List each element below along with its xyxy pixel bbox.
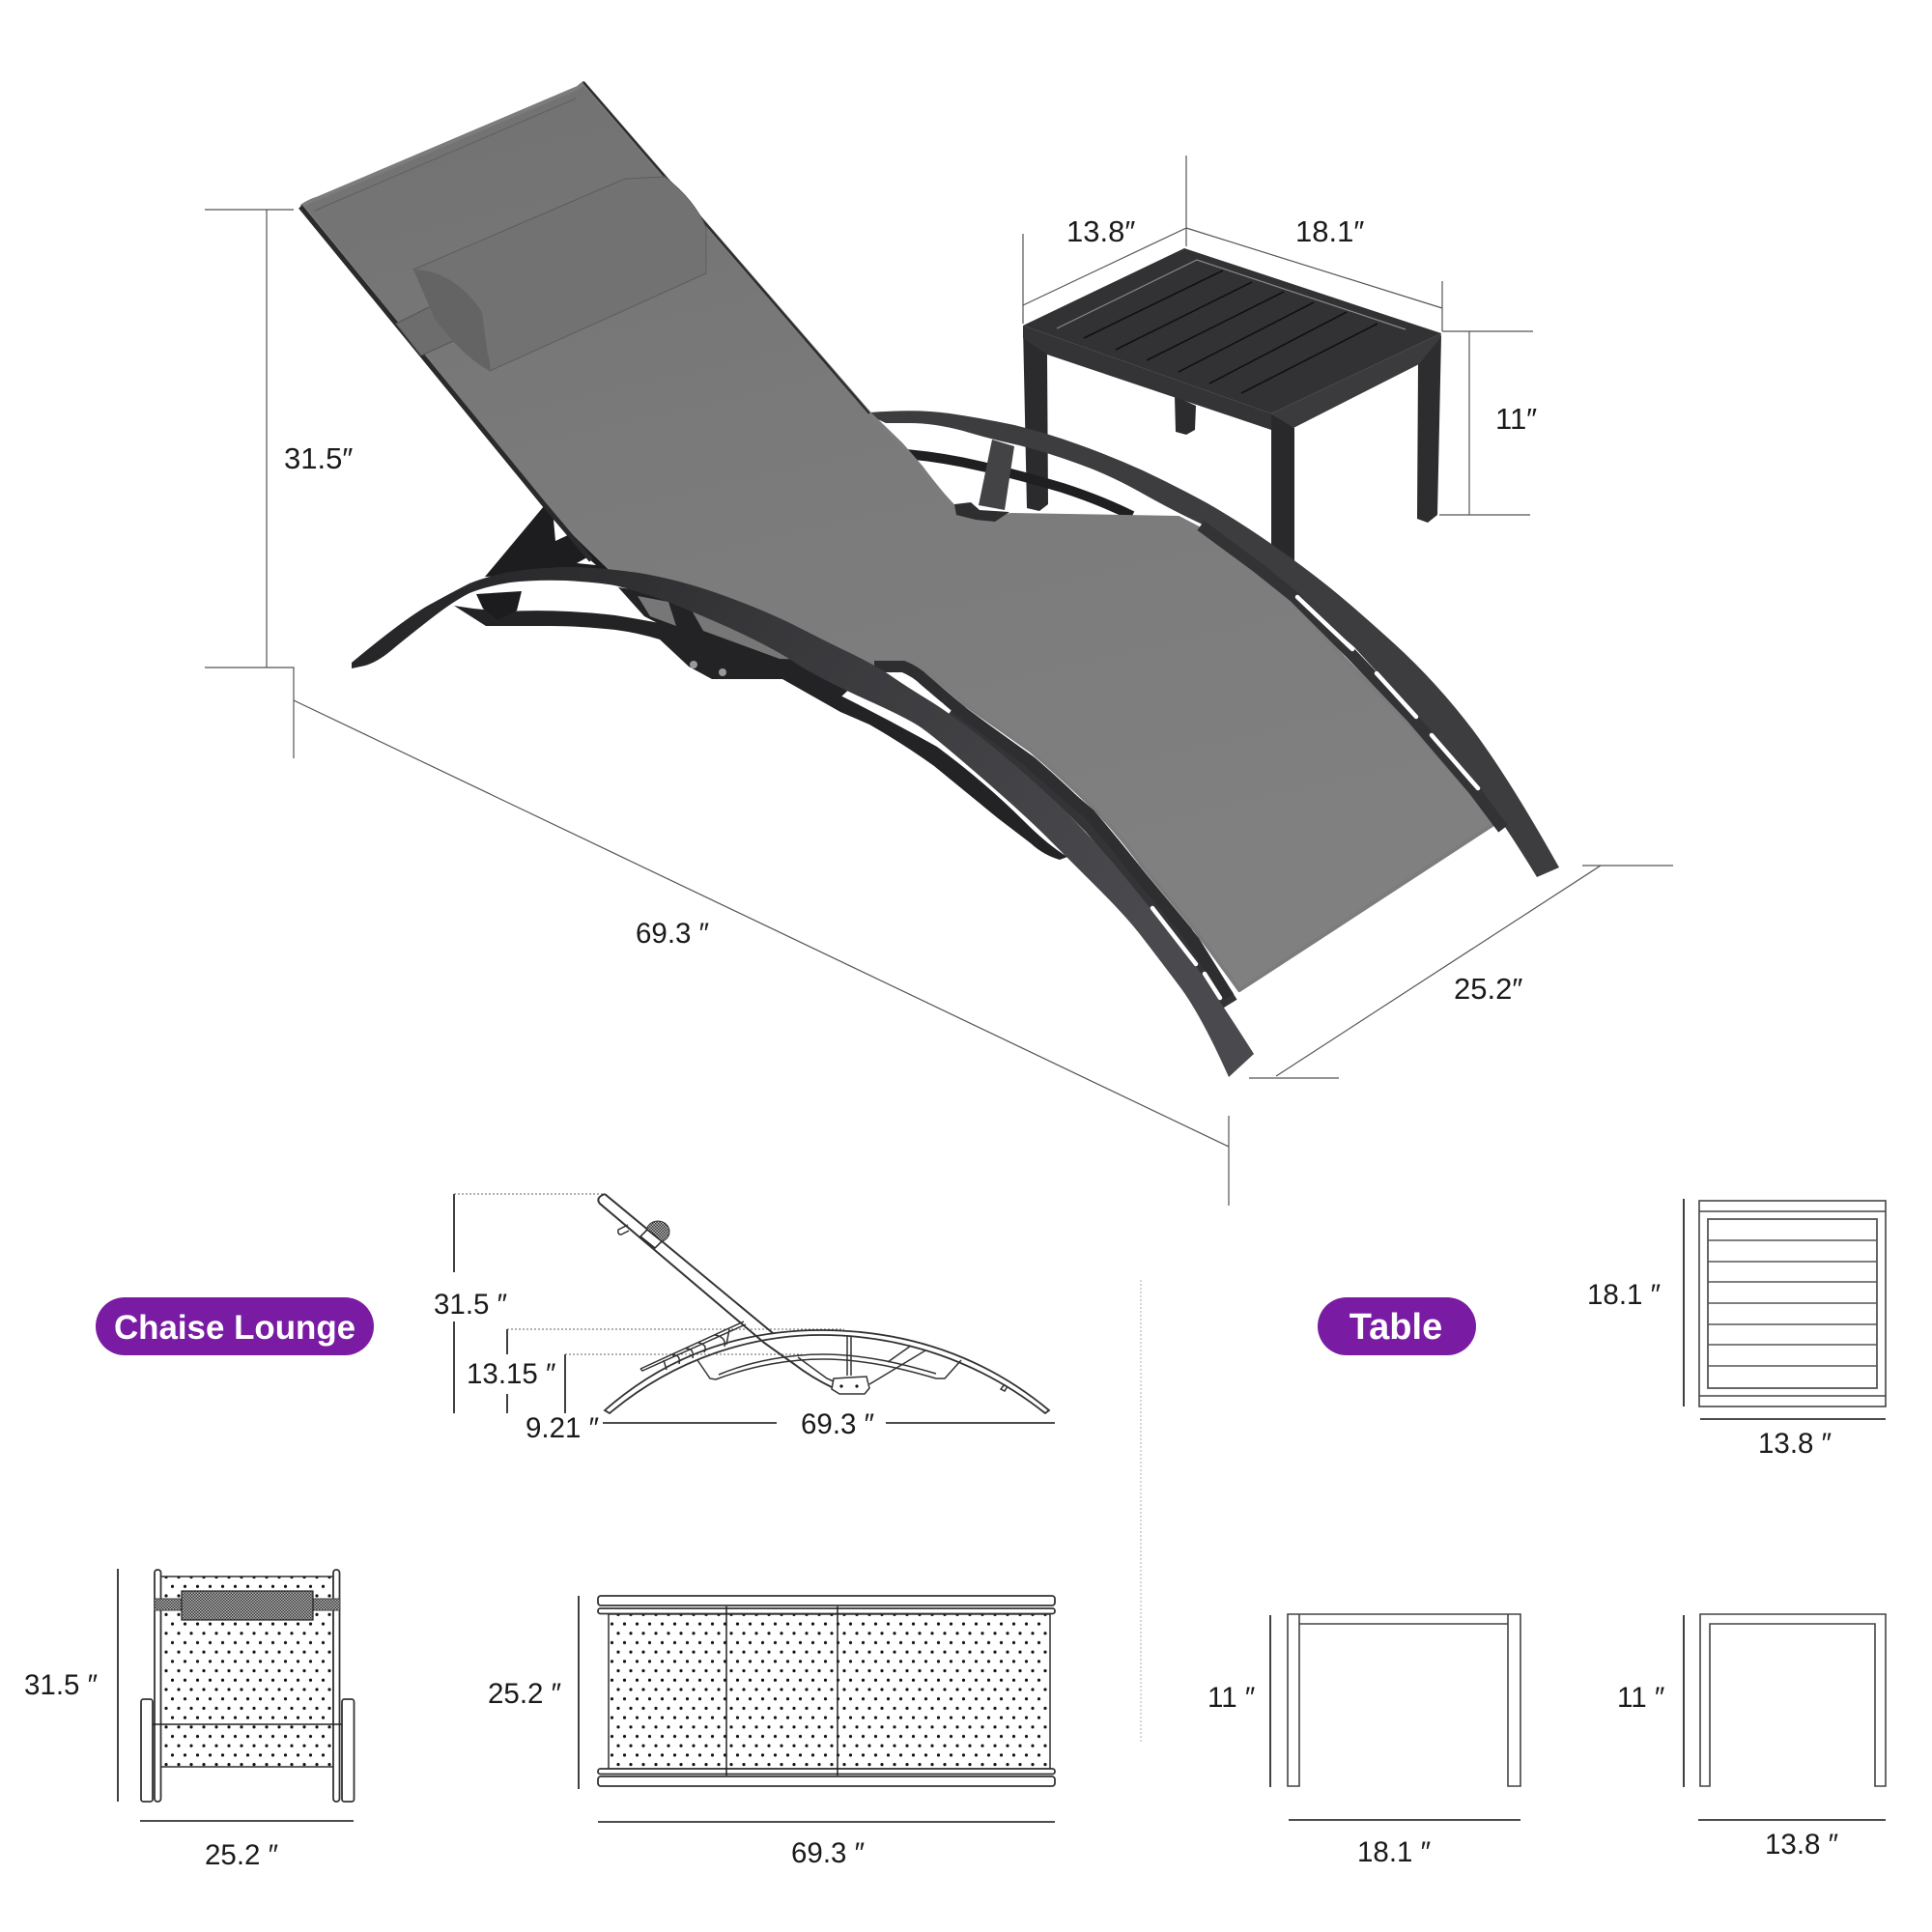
sling side rail [300, 207, 591, 560]
table front view drawing [1208, 1614, 1520, 1868]
labels: 31.5 ″ [434, 1289, 507, 1321]
labels: 18.1 ″ [1587, 1279, 1661, 1311]
rail slots near [916, 688, 1220, 998]
side view drawing [434, 1194, 1055, 1444]
cross members [726, 1606, 838, 1776]
pill: Chaise Lounge: Chaise Lounge [114, 1309, 355, 1347]
labels: 13.8 ″ [1765, 1829, 1838, 1861]
labels: 11 ″ [1617, 1682, 1664, 1714]
labels [1587, 1279, 1832, 1460]
labels [1208, 1682, 1431, 1868]
near arm rail [352, 567, 1254, 1077]
rails [598, 1596, 1055, 1786]
labels: 69.3 ″ [791, 1837, 865, 1869]
main dimension: length 69.3 [294, 700, 1229, 1206]
table back leg [1175, 396, 1196, 435]
table top [1023, 248, 1441, 413]
sling far edge rim [583, 82, 869, 413]
main dimension: height 31.5 [205, 210, 353, 758]
rails [155, 1570, 160, 1802]
main dimension: width 25.2 [1249, 866, 1673, 1078]
dimension lines [454, 1194, 1055, 1423]
dimension lines [579, 1596, 1055, 1822]
labels: 9.21 ″ [526, 1412, 599, 1444]
labels: 69.3 ″ [801, 1408, 874, 1440]
pill: Table [1318, 1297, 1476, 1355]
lower arc [716, 1354, 936, 1379]
head pillow [646, 1221, 669, 1242]
struts [798, 1336, 925, 1384]
labels: 13.8 ″ [1758, 1428, 1832, 1460]
labels [1617, 1682, 1838, 1861]
pill: Chaise Lounge [96, 1297, 374, 1355]
label 13.8: 13.8″ [1066, 214, 1135, 248]
table front leg [1271, 413, 1294, 570]
legs [697, 1360, 1008, 1391]
peg [618, 1225, 629, 1235]
strap [155, 1599, 340, 1610]
grey fabric below arm [638, 596, 676, 626]
wheels [141, 1699, 153, 1802]
table dimensions [1023, 156, 1537, 515]
dimension lines [1270, 1615, 1520, 1820]
rail slots far [1297, 597, 1478, 788]
dimension lines [1684, 1199, 1886, 1419]
wheel mechanism [476, 591, 522, 620]
dimension lines [1684, 1615, 1886, 1820]
sling fabric [302, 83, 1495, 990]
labels: 13.15 ″ [467, 1358, 555, 1390]
pivot bolts [690, 661, 726, 676]
pillow [182, 1591, 313, 1620]
pillow [413, 177, 706, 371]
labels [24, 1669, 278, 1871]
top view drawing [488, 1596, 1055, 1869]
far arm rail [869, 411, 1559, 877]
table photo [1023, 248, 1441, 570]
fabric [609, 1614, 1050, 1769]
label 18.1: 18.1″ [1295, 214, 1364, 248]
chaise lounge photo [300, 82, 1559, 1077]
strap [396, 306, 460, 355]
table right apron [1271, 333, 1441, 428]
labels: 18.1 ″ [1357, 1836, 1431, 1868]
outer arc [605, 1330, 1049, 1413]
table top view drawing [1587, 1199, 1886, 1460]
back view drawing [24, 1569, 354, 1871]
slat panel [1708, 1219, 1877, 1388]
labels: 31.5 ″ [24, 1669, 98, 1701]
labels: 25.2 ″ [488, 1678, 561, 1710]
struts and under-seat bar [618, 587, 855, 697]
table left apron [1023, 326, 1271, 430]
labels [488, 1678, 865, 1869]
far arm strap [979, 440, 1014, 510]
label 11: 11″ [1495, 402, 1537, 436]
label: 25.2″ [1454, 972, 1522, 1006]
dimension lines [118, 1569, 354, 1821]
table side view drawing [1617, 1614, 1886, 1861]
under-seat lower rail and bracket [454, 606, 1067, 860]
far side lower rail [906, 454, 1132, 516]
centre bracket [832, 1377, 869, 1394]
back support frame [485, 506, 618, 577]
label: 31.5″ [284, 441, 353, 475]
label: 69.3 ″ [636, 918, 709, 950]
labels: 25.2 ″ [205, 1839, 278, 1871]
cross line [153, 1723, 342, 1725]
table right leg [1417, 335, 1441, 523]
stitching [315, 99, 576, 211]
pill: Table: Table [1350, 1307, 1442, 1348]
table back left leg [1023, 327, 1048, 511]
table slats [1057, 260, 1406, 393]
ratchet support [640, 1321, 746, 1371]
hinge [954, 502, 1009, 522]
labels [434, 1289, 874, 1444]
fabric [160, 1577, 333, 1767]
backrest [598, 1194, 834, 1388]
divider [1140, 1280, 1142, 1743]
seat near inner rail [874, 667, 1229, 997]
near rail backing [952, 710, 1229, 1005]
seat far inner rail [1201, 526, 1503, 829]
strap [640, 1230, 662, 1248]
labels: 11 ″ [1208, 1682, 1255, 1714]
